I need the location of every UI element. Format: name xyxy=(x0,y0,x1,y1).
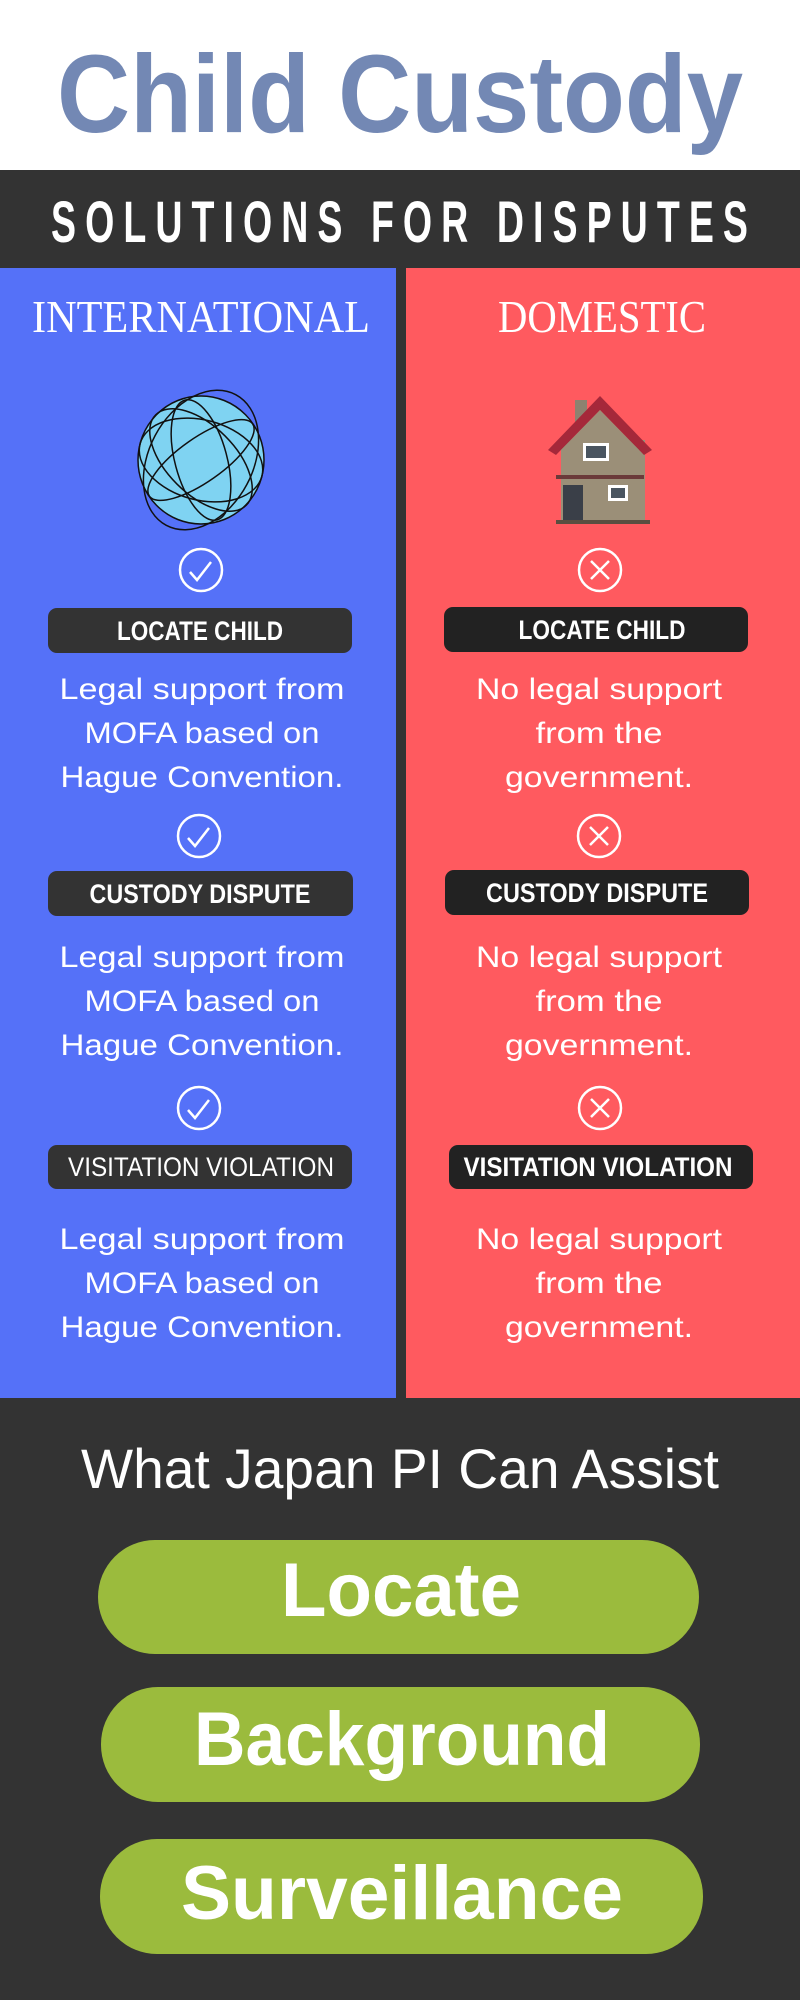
panel: international xyxy=(0,268,396,1398)
text block 1: Legal support from xyxy=(60,673,344,706)
text block 2: Hague Convention. xyxy=(60,1029,344,1062)
label: custody dispute: CUSTODY DISPUTE xyxy=(486,878,708,908)
label: visitation violation: VISITATION VIOLATION xyxy=(464,1152,732,1182)
label: locate child xyxy=(48,608,352,653)
label: custody dispute xyxy=(48,871,353,916)
button: background xyxy=(101,1687,700,1802)
label: locate child: LOCATE CHILD xyxy=(518,615,686,645)
label: visitation violation: VISITATION VIOLATION xyxy=(68,1152,334,1182)
text block 1: Hague Convention. xyxy=(60,761,344,794)
text block 2: from the xyxy=(536,985,662,1018)
text block 3: from the xyxy=(536,1267,662,1300)
text block 3: government. xyxy=(505,1311,693,1344)
text block 2 xyxy=(60,941,344,1062)
icon: cross 3 xyxy=(579,1087,621,1129)
button: background: Background xyxy=(194,1697,610,1782)
icon: cross 1 xyxy=(579,549,621,591)
divider xyxy=(396,268,406,1398)
heading: international: INTERNATIONAL xyxy=(32,291,370,342)
icon: check 3 xyxy=(178,1087,220,1129)
icon: check 2 xyxy=(178,815,220,857)
text block 1: MOFA based on xyxy=(84,717,320,750)
text block 1: No legal support xyxy=(476,673,723,706)
text block 1 xyxy=(476,673,723,794)
icon: house xyxy=(548,396,652,524)
text block 3: No legal support xyxy=(476,1223,723,1256)
text block 3 xyxy=(60,1223,344,1344)
text block 2: government. xyxy=(505,1029,693,1062)
icon: globe xyxy=(120,370,282,550)
text block 2: MOFA based on xyxy=(84,985,320,1018)
text block 3: Hague Convention. xyxy=(60,1311,344,1344)
label: custody dispute xyxy=(445,870,749,915)
text block 1: from the xyxy=(536,717,662,750)
text block 2: No legal support xyxy=(476,941,723,974)
panel: what Japan PI can assist xyxy=(0,1398,800,2000)
text block 2: Legal support from xyxy=(60,941,344,974)
label: visitation violation xyxy=(48,1145,352,1189)
label: visitation violation xyxy=(449,1145,753,1189)
icon: check 1 xyxy=(180,549,222,591)
text block 3 xyxy=(476,1223,723,1344)
label: custody dispute: CUSTODY DISPUTE xyxy=(90,879,310,909)
text block 2 xyxy=(476,941,723,1062)
icon: cross 2 xyxy=(578,815,620,857)
label: locate child xyxy=(444,607,748,652)
text block 3: MOFA based on xyxy=(84,1267,320,1300)
panel: domestic xyxy=(406,268,800,1398)
text block 3: Legal support from xyxy=(60,1223,344,1256)
text block 1 xyxy=(60,673,344,794)
button: surveillance xyxy=(100,1839,703,1954)
label: locate child: LOCATE CHILD xyxy=(117,616,283,646)
button: surveillance: Surveillance xyxy=(181,1851,623,1936)
text block 1: government. xyxy=(505,761,693,794)
button: locate: Locate xyxy=(281,1548,521,1633)
heading: assist: What Japan PI Can Assist xyxy=(81,1437,719,1500)
heading: domestic: DOMESTIC xyxy=(498,291,706,342)
subtitle band xyxy=(0,170,800,268)
button: locate xyxy=(98,1540,699,1654)
title: Child Custody xyxy=(57,33,743,156)
